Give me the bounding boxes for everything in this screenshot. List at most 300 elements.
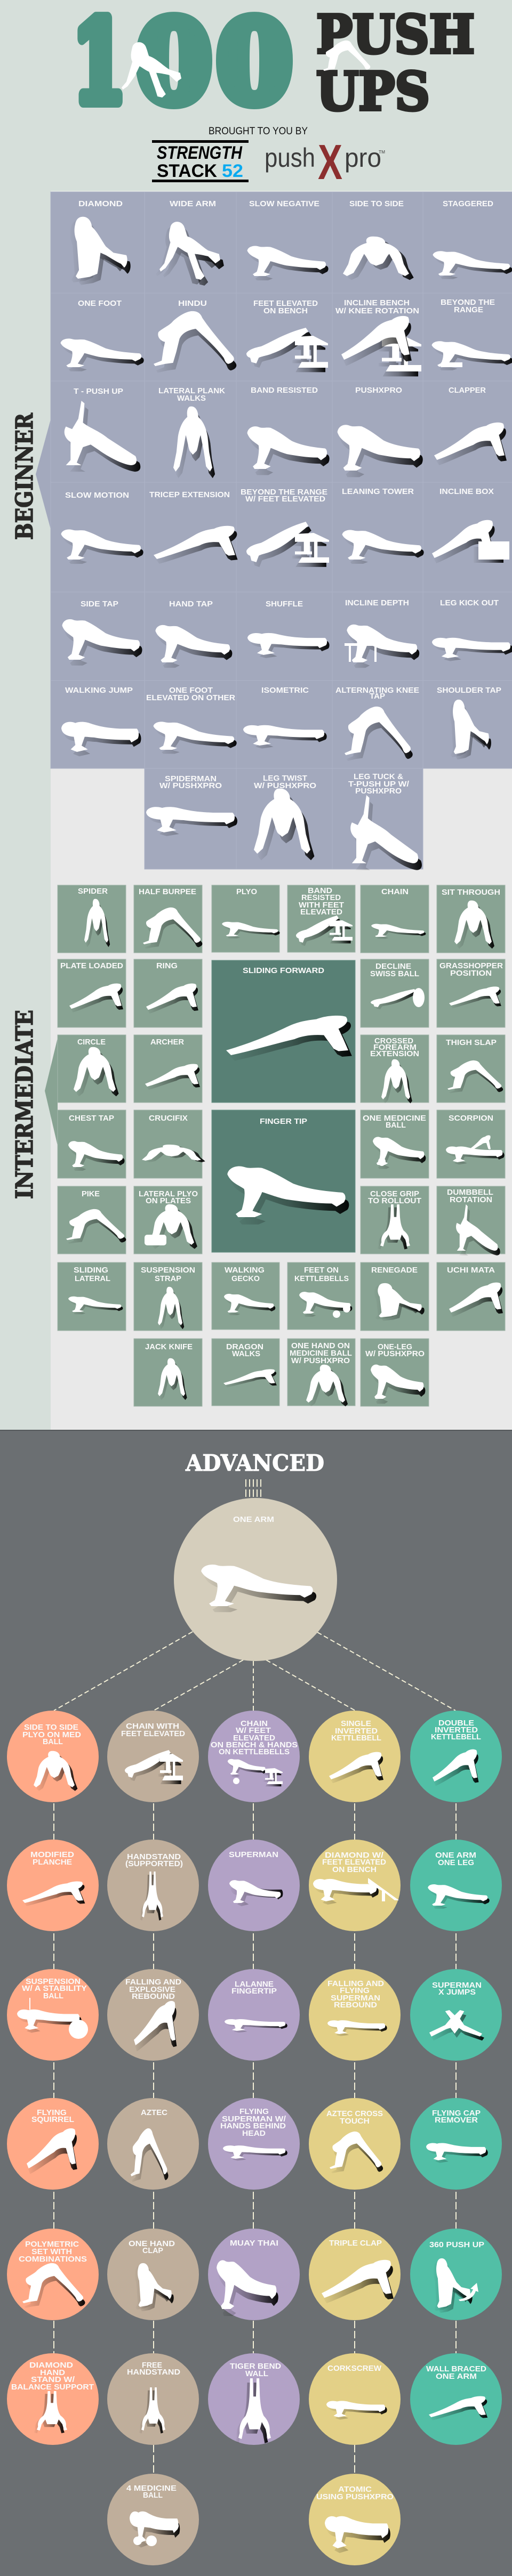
exercise: Hindu [154, 299, 236, 372]
icon: figure over 100 [122, 42, 181, 98]
exercise: Incline Box [432, 487, 509, 563]
exercise: Diamond Hand Stand w/ Balance Support: BALANCE SUPPORT [11, 2383, 94, 2392]
exercise: One Medicine Ball: BALL [386, 1121, 406, 1130]
exercise: Flying Superman w/ Hands Behind Head: HANDS BEHIND [220, 2121, 286, 2131]
exercise: LaLanne Fingertip [208, 1969, 300, 2061]
exercise: Flying Superman w/ Hands Behind Head [208, 2098, 300, 2190]
exercise: Shuffle [247, 600, 330, 658]
exercise: Decline Swiss Ball: DECLINE [375, 962, 411, 971]
exercise: Archer: ARCHER [150, 1038, 184, 1047]
exercise: Wide Arm [156, 199, 224, 286]
exercise: Modified Planche: PLANCHE [33, 1858, 72, 1867]
exercise: Falling and Explosive Rebound [107, 1969, 199, 2061]
exercise: PushXPro [338, 386, 423, 477]
exercise: One Foot: ONE FOOT [78, 299, 122, 308]
advanced heading: ADVANCED [185, 1450, 324, 1476]
exercise: Plate Loaded: PLATE LOADED [60, 961, 123, 970]
exercise: Double Inverted Kettlebell [410, 1711, 502, 1802]
exercise: Beyond the Range: BEYOND THE [441, 298, 495, 307]
exercise: One-Leg w/ PushXPro: ONE-LEG [378, 1342, 412, 1351]
exercise: Band Resisted with Feet Elevated: BAND [308, 886, 332, 895]
exercise: Corkscrew: CORKSCREW [327, 2364, 382, 2373]
exercise: Dumbbell Rotation: ROTATION [450, 1195, 492, 1204]
exercise: Feet on Kettlebells: KETTLEBELLS [294, 1274, 349, 1283]
exercise: Finger Tip [212, 1110, 355, 1252]
exercise: One Foot Elevated on Other: ONE FOOT [169, 686, 213, 695]
exercise: Incline Bench w/ Knee Rotation: W/ KNEE ROTATION [335, 306, 419, 315]
exercise: Tricep Extension: TRICEP EXTENSION [149, 490, 230, 499]
exercise: Chest Tap: CHEST TAP [69, 1114, 114, 1123]
title number 100 [73, 0, 292, 128]
exercise: Side to Side: SIDE TO SIDE [349, 199, 404, 208]
exercise: Flying Superman w/ Hands Behind Head: SUPERMAN W/ [222, 2115, 286, 2124]
exercise: Superman X Jumps: SUPERMAN [432, 1981, 482, 1990]
exercise: One Arm One Leg: ONE LEG [438, 1858, 474, 1867]
exercise: Falling and Explosive Rebound: REBOUND [132, 1992, 175, 2001]
exercise: Leg Tuck and T-Push Up w/ PushXPro: PUSHXPRO [355, 787, 402, 796]
exercise: Alternating Knee Tap [335, 686, 419, 761]
exercise: Leg Tuck and T-Push Up w/ PushXPro [348, 772, 422, 870]
exercise: Spider: SPIDER [78, 887, 108, 896]
exercise: Leg Twist w/ PushXPro: LEG TWIST [263, 774, 307, 783]
exercise: Dragon Walks: DRAGON [226, 1342, 263, 1351]
exercise: Staggered: STAGGERED [443, 199, 493, 208]
exercise: Alternating Knee Tap: TAP [370, 692, 385, 701]
exercise: Diamond Hand Stand w/ Balance Support [7, 2353, 99, 2445]
exercise: Falling and Explosive Rebound: FALLING AND [125, 1978, 181, 1987]
exercise: Single Inverted Kettlebell: INVERTED [335, 1727, 378, 1736]
exercise: Slow Motion [61, 491, 143, 564]
exercise: Incline Box: INCLINE BOX [439, 487, 494, 496]
exercise: Isometric: ISOMETRIC [261, 686, 309, 695]
exercise: Diamond w/ Feet Elevated on Bench: FEET ELEVATED [322, 1858, 386, 1867]
exercise: Decline Swiss Ball: SWISS BALL [370, 969, 419, 978]
title number 100: 0 [137, 0, 211, 128]
exercise: One Medicine Ball: ONE MEDICINE [363, 1114, 426, 1123]
exercise: One Hand Clap [107, 2229, 199, 2320]
logo: PushXPro: push [265, 143, 315, 173]
exercise: Finger Tip: FINGER TIP [260, 1117, 307, 1126]
exercise: Chain: CHAIN [381, 887, 409, 896]
exercise: Side to Side Plyo on Med Ball: PLYO ON MED [22, 1730, 81, 1739]
exercise: One Hand on Medicine Ball w/ PushXPro: ONE HAND ON [291, 1341, 350, 1350]
exercise: Lateral Plyo on Plates: LATERAL PLYO [139, 1189, 198, 1198]
exercise: Feet on Kettlebells: FEET ON [304, 1266, 339, 1275]
exercise: Plyo: PLYO [236, 887, 257, 896]
exercise: Tiger Bend Wall [208, 2353, 300, 2445]
exercise: Aztec [107, 2098, 199, 2190]
exercise: Slow Negative: SLOW NEGATIVE [249, 199, 319, 208]
exercise: Muay Thai: MUAY THAI [230, 2239, 278, 2248]
exercise: Single Inverted Kettlebell [309, 1711, 401, 1802]
exercise: Clapper [434, 386, 507, 465]
exercise: Chain with Feet Elevated: CHAIN WITH [126, 1722, 179, 1731]
exercise: Suspension w/ a Stability Ball: SUSPENSION [26, 1977, 81, 1986]
title words PUSH UPS: UPS [316, 61, 430, 123]
exercise: Walking Gecko: GECKO [231, 1274, 260, 1283]
exercise: Dumbbell Rotation: DUMBBELL [447, 1188, 493, 1197]
exercise: Spiderman w/ PushXPro: W/ PUSHXPRO [159, 781, 222, 790]
exercise: Superman: SUPERMAN [229, 1850, 278, 1859]
exercise: 360 Push Up: 360 PUSH UP [429, 2240, 484, 2249]
exercise: Atomic using PushXPro: USING PUSHXPRO [316, 2492, 394, 2501]
exercise: Feet Elevated on Bench: ON BENCH [263, 306, 308, 315]
exercise: Side to Side [343, 199, 414, 280]
exercise: Falling and Flying Superman Rebound: REBOUND [334, 2000, 377, 2010]
exercise: Crucifix [142, 1114, 205, 1162]
beginner heading: BEGINNER [11, 413, 38, 540]
title words PUSH UPS [316, 4, 475, 123]
exercise: Jack Knife: JACK KNIFE [145, 1342, 193, 1351]
exercise: Wide Arm: WIDE ARM [170, 199, 216, 208]
exercise: Beyond the Range w/ Feet Elevated: BEYOND THE RANGE [241, 488, 327, 497]
exercise: Shoulder Tap: SHOULDER TAP [437, 686, 501, 695]
logo: PushXPro: pro [345, 143, 381, 173]
exercise: Half Burpee: HALF BURPEE [139, 887, 196, 896]
exercise: Lateral Plyo on Plates: ON PLATES [146, 1196, 191, 1205]
exercise: Side to Side Plyo on Med Ball [7, 1711, 99, 1802]
exercise: Leg Tuck and T-Push Up w/ PushXPro: T-PUSH UP W/ [348, 780, 410, 789]
exercise: Grasshopper Position: POSITION [450, 969, 492, 978]
logo: Strength Stack 52 [152, 140, 249, 182]
exercise: Pike [66, 1189, 126, 1244]
exercise: Side Tap [62, 600, 142, 666]
exercise: Tricep Extension [149, 490, 238, 564]
exercise: Close Grip to Rollout: CLOSE GRIP [370, 1189, 419, 1198]
exercise: T-Push Up: T - PUSH UP [74, 387, 123, 396]
exercise: Feet Elevated on Bench: FEET ELEVATED [253, 299, 318, 308]
exercise: Close Grip to Rollout: TO ROLLOUT [368, 1196, 421, 1205]
exercise: Sit Through [442, 888, 500, 949]
exercise: Shoulder Tap [437, 686, 501, 759]
exercise: One Arm: ONE ARM [233, 1515, 274, 1524]
exercise: Walking Jump [61, 686, 141, 756]
exercise: Modified Planche: MODIFIED [30, 1850, 74, 1859]
exercise: Handstand (Supported): HANDSTAND [127, 1852, 181, 1861]
exercise: One Hand on Medicine Ball w/ PushXPro [290, 1341, 352, 1406]
exercise: Sit Through: SIT THROUGH [442, 888, 500, 897]
exercise: Side to Side Plyo on Med Ball: SIDE TO SIDE [24, 1723, 78, 1732]
exercise: 4 Medicine Ball [107, 2474, 199, 2565]
exercise: Thigh Slap: THIGH SLAP [446, 1038, 497, 1047]
exercise: Isometric [243, 686, 327, 749]
logo: PushXPro: X [318, 134, 342, 190]
exercise: Slow Motion: SLOW MOTION [65, 491, 129, 500]
exercise: One Medicine Ball [363, 1114, 426, 1169]
exercise: Band Resisted with Feet Elevated: ELEVATED [300, 908, 342, 917]
exercise: Wall Braced One Arm [410, 2353, 502, 2445]
exercise: Alternating Knee Tap: ALTERNATING KNEE [335, 686, 419, 695]
exercise: Leaning Tower: LEANING TOWER [342, 487, 414, 496]
exercise: Dumbbell Rotation [447, 1188, 500, 1255]
exercise: Sliding Lateral: SLIDING [74, 1266, 108, 1275]
exercise: Double Inverted Kettlebell: INVERTED [435, 1726, 478, 1735]
exercise: T-Push Up [65, 387, 140, 472]
exercise: Atomic using PushXPro [309, 2474, 401, 2565]
exercise: Decline Swiss Ball [370, 962, 425, 1009]
exercise: Incline Bench w/ Knee Rotation: INCLINE BENCH [344, 298, 410, 307]
exercise: Walking Jump: WALKING JUMP [65, 686, 133, 695]
exercise: Diamond: DIAMOND [78, 199, 123, 208]
exercise: One Hand Clap: CLAP [142, 2246, 163, 2255]
exercise: Polymetric Set with Combinations [7, 2229, 99, 2320]
exercise: Aztec Cross Touch [309, 2098, 401, 2190]
exercise: Chest Tap [68, 1114, 124, 1171]
exercise: LaLanne Fingertip: LALANNE [235, 1980, 274, 1989]
exercise: Flying Squirrel: SQUIRREL [31, 2115, 74, 2124]
exercise: Chain w/ Feet Elevated on Bench and Hands on Kettlebells: ON KETTLEBELLS [219, 1747, 290, 1756]
exercise: Shuffle: SHUFFLE [266, 600, 303, 609]
exercise: Falling and Flying Superman Rebound [309, 1969, 401, 2061]
brought to you by: BROUGHT TO YOU BY [209, 126, 308, 137]
exercise: Sliding Lateral [68, 1266, 123, 1314]
exercise: Tiger Bend Wall: WALL [245, 2369, 268, 2378]
logo: Strength Stack 52: STRENGTH [157, 143, 243, 163]
exercise: Crossed Forearm Extension: CROSSED [374, 1036, 413, 1046]
intermediate pointer [45, 1038, 58, 1146]
exercise: Suspension w/ a Stability Ball: W/ A STABILITY [22, 1984, 87, 1993]
exercise: Grasshopper Position [439, 961, 503, 1008]
exercise: Circle [74, 1038, 119, 1096]
exercise: Leg Kick Out [432, 598, 512, 661]
title number 100: 0 [217, 0, 292, 128]
section: intermediate [11, 885, 505, 1406]
connectors [54, 1479, 456, 2474]
exercise: LaLanne Fingertip: FINGERTIP [231, 1987, 277, 1996]
exercise: Flying Superman w/ Hands Behind Head: FLYING [239, 2107, 269, 2116]
exercise: One Arm One Leg [410, 1840, 502, 1931]
exercise: Feet Elevated on Bench [246, 299, 328, 372]
exercise: Polymetric Set with Combinations: SET WITH [31, 2247, 72, 2256]
exercise: Beyond the Range [432, 298, 512, 370]
exercise: Beyond the Range: RANGE [454, 305, 483, 314]
exercise: Diamond w/ Feet Elevated on Bench: DIAMOND W/ [325, 1851, 384, 1860]
exercise: Hand Tap [155, 600, 232, 668]
exercise: Leaning Tower [342, 487, 424, 564]
exercise: Single Inverted Kettlebell: KETTLEBELL [331, 1733, 381, 1743]
sponsors [152, 126, 385, 190]
icon: figure between PUSH and UPS [323, 40, 370, 71]
exercise: Falling and Flying Superman Rebound: FALLING AND [327, 1979, 384, 1988]
exercise: Plyo [222, 887, 280, 938]
exercise: One-Leg w/ PushXPro [365, 1342, 425, 1404]
exercise: Chain [371, 887, 426, 939]
exercise: Free Handstand: HANDSTAND [127, 2368, 180, 2377]
exercise: Suspension Strap: STRAP [155, 1274, 181, 1283]
exercise: Aztec: AZTEC [141, 2108, 167, 2117]
exercise: Superman X Jumps: X JUMPS [438, 1988, 476, 1997]
exercise: Leg Tuck and T-Push Up w/ PushXPro: LEG TUCK & [354, 772, 403, 781]
exercise: Spider [78, 887, 110, 947]
exercise: Wall Braced One Arm: ONE ARM [436, 2372, 477, 2381]
exercise: Lateral Plyo on Plates [139, 1189, 198, 1249]
exercise: Suspension Strap: SUSPENSION [141, 1266, 195, 1275]
exercise: Double Inverted Kettlebell: KETTLEBELL [431, 1732, 481, 1741]
exercise: Diamond [70, 199, 131, 285]
exercise: Band Resisted with Feet Elevated: WITH FEET [299, 901, 344, 910]
exercise: Chain w/ Feet Elevated on Bench and Hands on Kettlebells [208, 1711, 300, 1802]
exercise: Free Handstand [107, 2353, 199, 2445]
exercise: Flying Superman w/ Hands Behind Head: HEAD [242, 2129, 266, 2138]
exercise: Double Inverted Kettlebell: DOUBLE [438, 1719, 474, 1728]
exercise: Dragon Walks [223, 1342, 277, 1387]
logo: PushXPro: TM [379, 150, 385, 155]
exercise: Incline Depth: INCLINE DEPTH [345, 598, 409, 607]
exercise: Muay Thai [208, 2229, 300, 2320]
exercise: One Hand on Medicine Ball w/ PushXPro: MEDICINE BALL [290, 1349, 352, 1358]
exercise: 4 Medicine Ball: 4 MEDICINE [126, 2484, 177, 2493]
exercise: Half Burpee [139, 887, 202, 949]
exercise: Band Resisted with Feet Elevated [296, 886, 353, 946]
exercise: Free Handstand: FREE [142, 2361, 162, 2370]
exercise: 360 Push Up [410, 2229, 502, 2320]
exercise: Band Resisted: BAND RESISTED [251, 386, 318, 395]
exercise: Chain w/ Feet Elevated on Bench and Hands on Kettlebells: W/ FEET [236, 1726, 271, 1735]
exercise: Plate Loaded [60, 961, 123, 1012]
exercise: Clapper: CLAPPER [449, 386, 486, 395]
exercise: Feet on Kettlebells [294, 1266, 352, 1318]
exercise: Beyond the Range w/ Feet Elevated [241, 488, 329, 567]
exercise: Lateral Plank Walks [158, 386, 225, 478]
exercise: Diamond Hand Stand w/ Balance Support: STAND W/ [31, 2375, 75, 2384]
exercise: Tiger Bend Wall: TIGER BEND [230, 2362, 281, 2371]
exercise: Lateral Plank Walks: WALKS [177, 394, 206, 403]
exercise: Slow Negative [247, 199, 329, 280]
exercise: Single Inverted Kettlebell: SINGLE [341, 1719, 371, 1728]
exercise: Chain w/ Feet Elevated on Bench and Hands on Kettlebells: ON BENCH & HANDS [211, 1740, 298, 1749]
title words PUSH UPS: PUSH [316, 4, 475, 66]
exercise: Ring [146, 961, 198, 1014]
exercise: One Foot [61, 299, 144, 371]
exercise: Circle: CIRCLE [77, 1038, 106, 1047]
exercise: Hindu: HINDU [178, 299, 207, 308]
intermediate heading: INTERMEDIATE [11, 1010, 38, 1199]
exercise: Leg Kick Out: LEG KICK OUT [440, 598, 499, 607]
beginner pointer [36, 419, 51, 529]
exercise: Suspension Strap [141, 1266, 195, 1329]
exercise: Diamond w/ Feet Elevated on Bench: ON BENCH [332, 1865, 377, 1874]
exercise: Side Tap: SIDE TAP [81, 600, 118, 609]
exercise: Ring: RING [156, 961, 178, 970]
exercise: Hand Tap: HAND TAP [169, 600, 213, 609]
exercise: One Arm [174, 1498, 337, 1661]
exercise: Lateral Plank Walks: LATERAL PLANK [158, 386, 225, 395]
exercise: Uchi Mata: UCHI MATA [447, 1266, 495, 1275]
exercise: One-Leg w/ PushXPro: W/ PUSHXPRO [365, 1349, 425, 1358]
exercise: Dragon Walks: WALKS [232, 1349, 260, 1358]
exercise: Grasshopper Position: GRASSHOPPER [439, 961, 503, 970]
exercise: One Hand Clap: ONE HAND [129, 2239, 175, 2248]
exercise: Incline Depth [345, 598, 419, 668]
section: beginner [11, 192, 512, 870]
exercise: Crucifix: CRUCIFIX [149, 1114, 188, 1123]
exercise: Scorpion [446, 1114, 505, 1164]
logo: PushXPro [265, 134, 385, 190]
exercise: Triple Clap [309, 2229, 401, 2320]
exercise: Crossed Forearm Extension: EXTENSION [370, 1049, 419, 1058]
exercise: Chain with Feet Elevated [107, 1711, 199, 1802]
exercise: Diamond Hand Stand w/ Balance Support: DIAMOND [29, 2361, 73, 2370]
exercise: Falling and Flying Superman Rebound: SUPERMAN [331, 1994, 380, 2003]
exercise: Pike: PIKE [82, 1189, 100, 1198]
exercise: Spiderman w/ PushXPro: SPIDERMAN [165, 774, 217, 783]
exercise: Uchi Mata [447, 1266, 503, 1317]
exercise: Scorpion: SCORPION [449, 1114, 493, 1123]
section: advanced [0, 1430, 512, 2576]
exercise: Polymetric Set with Combinations: POLYMETRIC [25, 2240, 79, 2249]
exercise: Triple Clap: TRIPLE CLAP [329, 2239, 382, 2248]
exercise: Polymetric Set with Combinations: COMBINATIONS [19, 2255, 87, 2264]
exercise: Archer [145, 1038, 200, 1090]
exercise: 4 Medicine Ball: BALL [143, 2491, 163, 2500]
exercise: Corkscrew [309, 2353, 401, 2445]
exercise: Sliding Lateral: LATERAL [75, 1274, 110, 1283]
exercise: Spiderman w/ PushXPro [146, 774, 237, 836]
exercise: Chain w/ Feet Elevated on Bench and Hands on Kettlebells: ELEVATED [233, 1733, 275, 1743]
exercise: One Hand on Medicine Ball w/ PushXPro: W/ PUSHXPRO [291, 1356, 350, 1365]
exercise: Leg Twist w/ PushXPro: W/ PUSHXPRO [254, 781, 316, 790]
title number 100: 1 [73, 0, 126, 128]
exercise: Crossed Forearm Extension: FOREARM [373, 1043, 417, 1052]
exercise: Superman [208, 1840, 300, 1931]
exercise: Modified Planche [7, 1840, 99, 1931]
exercise: Staggered [433, 199, 512, 279]
exercise: Side to Side Plyo on Med Ball: BALL [43, 1737, 63, 1746]
exercise: Diamond Hand Stand w/ Balance Support: HAND [40, 2368, 65, 2377]
exercise: Walking Gecko [224, 1266, 275, 1315]
exercise: Incline Bench w/ Knee Rotation [335, 298, 421, 376]
exercise: Wall Braced One Arm: WALL BRACED [426, 2364, 486, 2374]
exercise: Beyond the Range w/ Feet Elevated: W/ FEET ELEVATED [245, 495, 325, 504]
exercise: Jack Knife [145, 1342, 193, 1400]
exercise: Aztec Cross Touch: AZTEC CROSS [326, 2109, 383, 2118]
exercise: Atomic using PushXPro: ATOMIC [338, 2485, 372, 2494]
exercise: One Foot Elevated on Other [146, 686, 237, 754]
exercise: One Arm One Leg: ONE ARM [435, 1851, 476, 1860]
exercise: Chain with Feet Elevated: FEET ELEVATED [121, 1729, 185, 1738]
logo: Strength Stack 52: STACK [157, 161, 217, 181]
exercise: Flying Squirrel: FLYING [37, 2108, 67, 2117]
exercise: PushXPro: PUSHXPRO [355, 386, 402, 395]
exercise: Handstand (Supported) [107, 1840, 199, 1931]
exercise: Flying Cap Remover: FLYING CAP [432, 2109, 481, 2118]
exercise: Aztec Cross Touch: TOUCH [340, 2117, 370, 2126]
exercise: Thigh Slap [446, 1038, 503, 1093]
exercise: Suspension w/ a Stability Ball [7, 1969, 99, 2061]
exercise: Falling and Flying Superman Rebound: FLYING [340, 1986, 370, 1995]
exercise: Renegade [371, 1266, 425, 1321]
exercise: Crossed Forearm Extension [370, 1036, 419, 1103]
logo: Strength Stack 52: 52 [222, 161, 243, 181]
exercise: Flying Squirrel [7, 2098, 99, 2190]
exercise: Superman X Jumps [410, 1969, 502, 2061]
exercise: Band Resisted with Feet Elevated: RESISTED [301, 893, 341, 902]
title [73, 0, 475, 128]
exercise: One Foot Elevated on Other: ELEVATED ON OTHER [146, 693, 235, 702]
exercise: Leg Twist w/ PushXPro [254, 774, 316, 860]
exercise: Sliding Forward [212, 960, 355, 1103]
exercise: Falling and Explosive Rebound: EXPLOSIVE [129, 1985, 175, 1994]
exercise: Flying Cap Remover [410, 2098, 502, 2190]
exercise: Renegade: RENEGADE [371, 1266, 418, 1275]
exercise: Chain w/ Feet Elevated on Bench and Hands on Kettlebells: CHAIN [241, 1719, 268, 1728]
exercise: Sliding Forward: SLIDING FORWARD [243, 966, 324, 975]
exercise: Suspension w/ a Stability Ball: BALL [43, 1991, 63, 2000]
exercise: Handstand (Supported): (SUPPORTED) [125, 1859, 183, 1868]
exercise: Diamond w/ Feet Elevated on Bench [309, 1840, 401, 1931]
exercise: Close Grip to Rollout [368, 1189, 421, 1250]
exercise: Flying Cap Remover: REMOVER [435, 2116, 478, 2125]
